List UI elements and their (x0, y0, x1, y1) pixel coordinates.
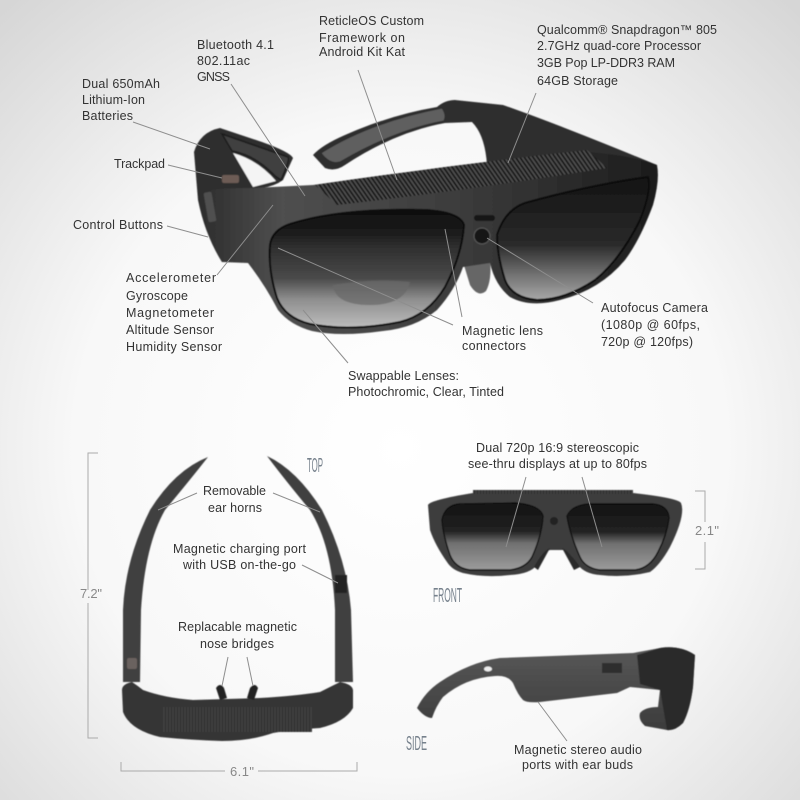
label: control buttons: Control Buttons (73, 218, 163, 232)
label: autofocus camera (601, 301, 708, 349)
label: ReticleOS: Android Kit Kat (319, 45, 406, 59)
dimension: height 2.1: 2.1" (695, 523, 719, 538)
top-view glasses image (122, 456, 353, 741)
label: batteries (82, 77, 160, 123)
nose piece (463, 260, 490, 293)
vent ridge (473, 490, 633, 494)
label: sensors: Accelerometer (126, 271, 216, 285)
nose bridge pads (216, 685, 258, 700)
left lens display reflection (333, 281, 410, 305)
right lens (567, 504, 669, 570)
label: autofocus camera: Autofocus Camera (601, 301, 708, 315)
label: swappable lenses (348, 369, 504, 399)
label: autofocus camera: (1080p @ 60fps, (601, 318, 700, 332)
label: batteries: Lithium-Ion (82, 93, 145, 107)
label: sensors (126, 271, 222, 354)
text: TOP (307, 455, 323, 477)
label: magnetic lens connectors: connectors (462, 339, 526, 353)
label: displays (468, 441, 647, 471)
label: batteries: Dual 650mAh (82, 77, 160, 91)
label: Snapdragon specs (537, 23, 717, 88)
callout lines (133, 70, 602, 741)
left lens (442, 503, 543, 570)
label: audio ports: ports with ear buds (522, 758, 633, 772)
dimension: width 6.1 (121, 762, 357, 779)
label: connectivity: GNSS (197, 70, 230, 84)
far temple inner pad (321, 108, 445, 163)
label: ReticleOS: ReticleOS Custom (319, 14, 424, 28)
right lens (497, 177, 649, 300)
label: trackpad: Trackpad (114, 157, 165, 171)
label: sensors: Gyroscope (126, 289, 188, 303)
side-view glasses image (417, 647, 695, 730)
label: connectivity (197, 38, 274, 84)
label: magnetic lens connectors (462, 324, 543, 353)
front bar (122, 682, 353, 741)
dimension: width 6.1: 6.1" (230, 764, 254, 779)
camera (474, 228, 490, 244)
temple opening (233, 153, 276, 187)
camera slot (474, 215, 495, 221)
label: nose bridges (178, 620, 297, 651)
label: ear horns (203, 484, 266, 515)
frame body (200, 152, 658, 334)
label: audio ports: Magnetic stereo audio (514, 743, 642, 757)
label: sensors: Magnetometer (126, 306, 214, 320)
label: Snapdragon specs: 3GB Pop LP-DDR3 RAM (537, 56, 675, 70)
label: audio ports (514, 743, 642, 772)
label: Snapdragon specs: 2.7GHz quad-core Processor (537, 39, 701, 53)
vent (163, 707, 312, 732)
charging port (335, 575, 347, 593)
arm and hinge (417, 647, 695, 730)
label: ear horns: ear horns (208, 501, 262, 515)
dimension: height 7.2: 7.2" (80, 586, 102, 601)
main glasses image (194, 100, 658, 334)
left lens (270, 210, 464, 328)
port dots (602, 663, 622, 673)
label: ReticleOS: Framework on (319, 31, 405, 45)
dimension: height 7.2 (80, 453, 102, 738)
trackpad (222, 175, 239, 183)
label: charging port: with USB on-the-go (182, 558, 296, 572)
heat vents (315, 150, 607, 205)
front end (637, 647, 695, 730)
label: Snapdragon specs: Qualcomm® Snapdragon™ 805 (537, 23, 717, 37)
front-view glasses image (428, 490, 682, 576)
text: FRONT (433, 585, 462, 607)
label: magnetic lens connectors: Magnetic lens (462, 324, 543, 338)
label: displays: see-thru displays at up to 80fps (468, 457, 647, 471)
label: ReticleOS (319, 14, 424, 59)
label: sensors: Humidity Sensor (126, 340, 222, 354)
right arm (267, 456, 353, 682)
label: nose bridges: nose bridges (200, 637, 274, 651)
label: ear horns: Removable (203, 484, 266, 498)
label: charging port (173, 542, 307, 572)
label: connectivity: 802.11ac (197, 54, 250, 68)
dimension: height 2.1 (695, 491, 719, 569)
frame (428, 493, 682, 576)
label: sensors: Altitude Sensor (126, 323, 214, 337)
arm hole (484, 666, 492, 672)
near temple block (194, 128, 293, 262)
label: displays: Dual 720p 16:9 stereoscopic (476, 441, 639, 455)
left arm (123, 457, 208, 682)
control buttons (203, 192, 217, 222)
near temple pad (222, 134, 288, 180)
text: SIDE (406, 733, 427, 755)
label: swappable lenses: Swappable Lenses: (348, 369, 459, 383)
label: connectivity: Bluetooth 4.1 (197, 38, 274, 52)
label: autofocus camera: 720p @ 120fps) (601, 335, 693, 349)
trackpad (127, 658, 137, 669)
nose pieces (534, 548, 580, 570)
label: charging port: Magnetic charging port (173, 542, 307, 556)
far temple arm (313, 100, 657, 185)
camera (550, 517, 558, 525)
label: batteries: Batteries (82, 109, 133, 123)
label: swappable lenses: Photochromic, Clear, Tinted (348, 385, 504, 399)
label: Snapdragon specs: 64GB Storage (537, 74, 618, 88)
label: nose bridges: Replacable magnetic (178, 620, 297, 634)
